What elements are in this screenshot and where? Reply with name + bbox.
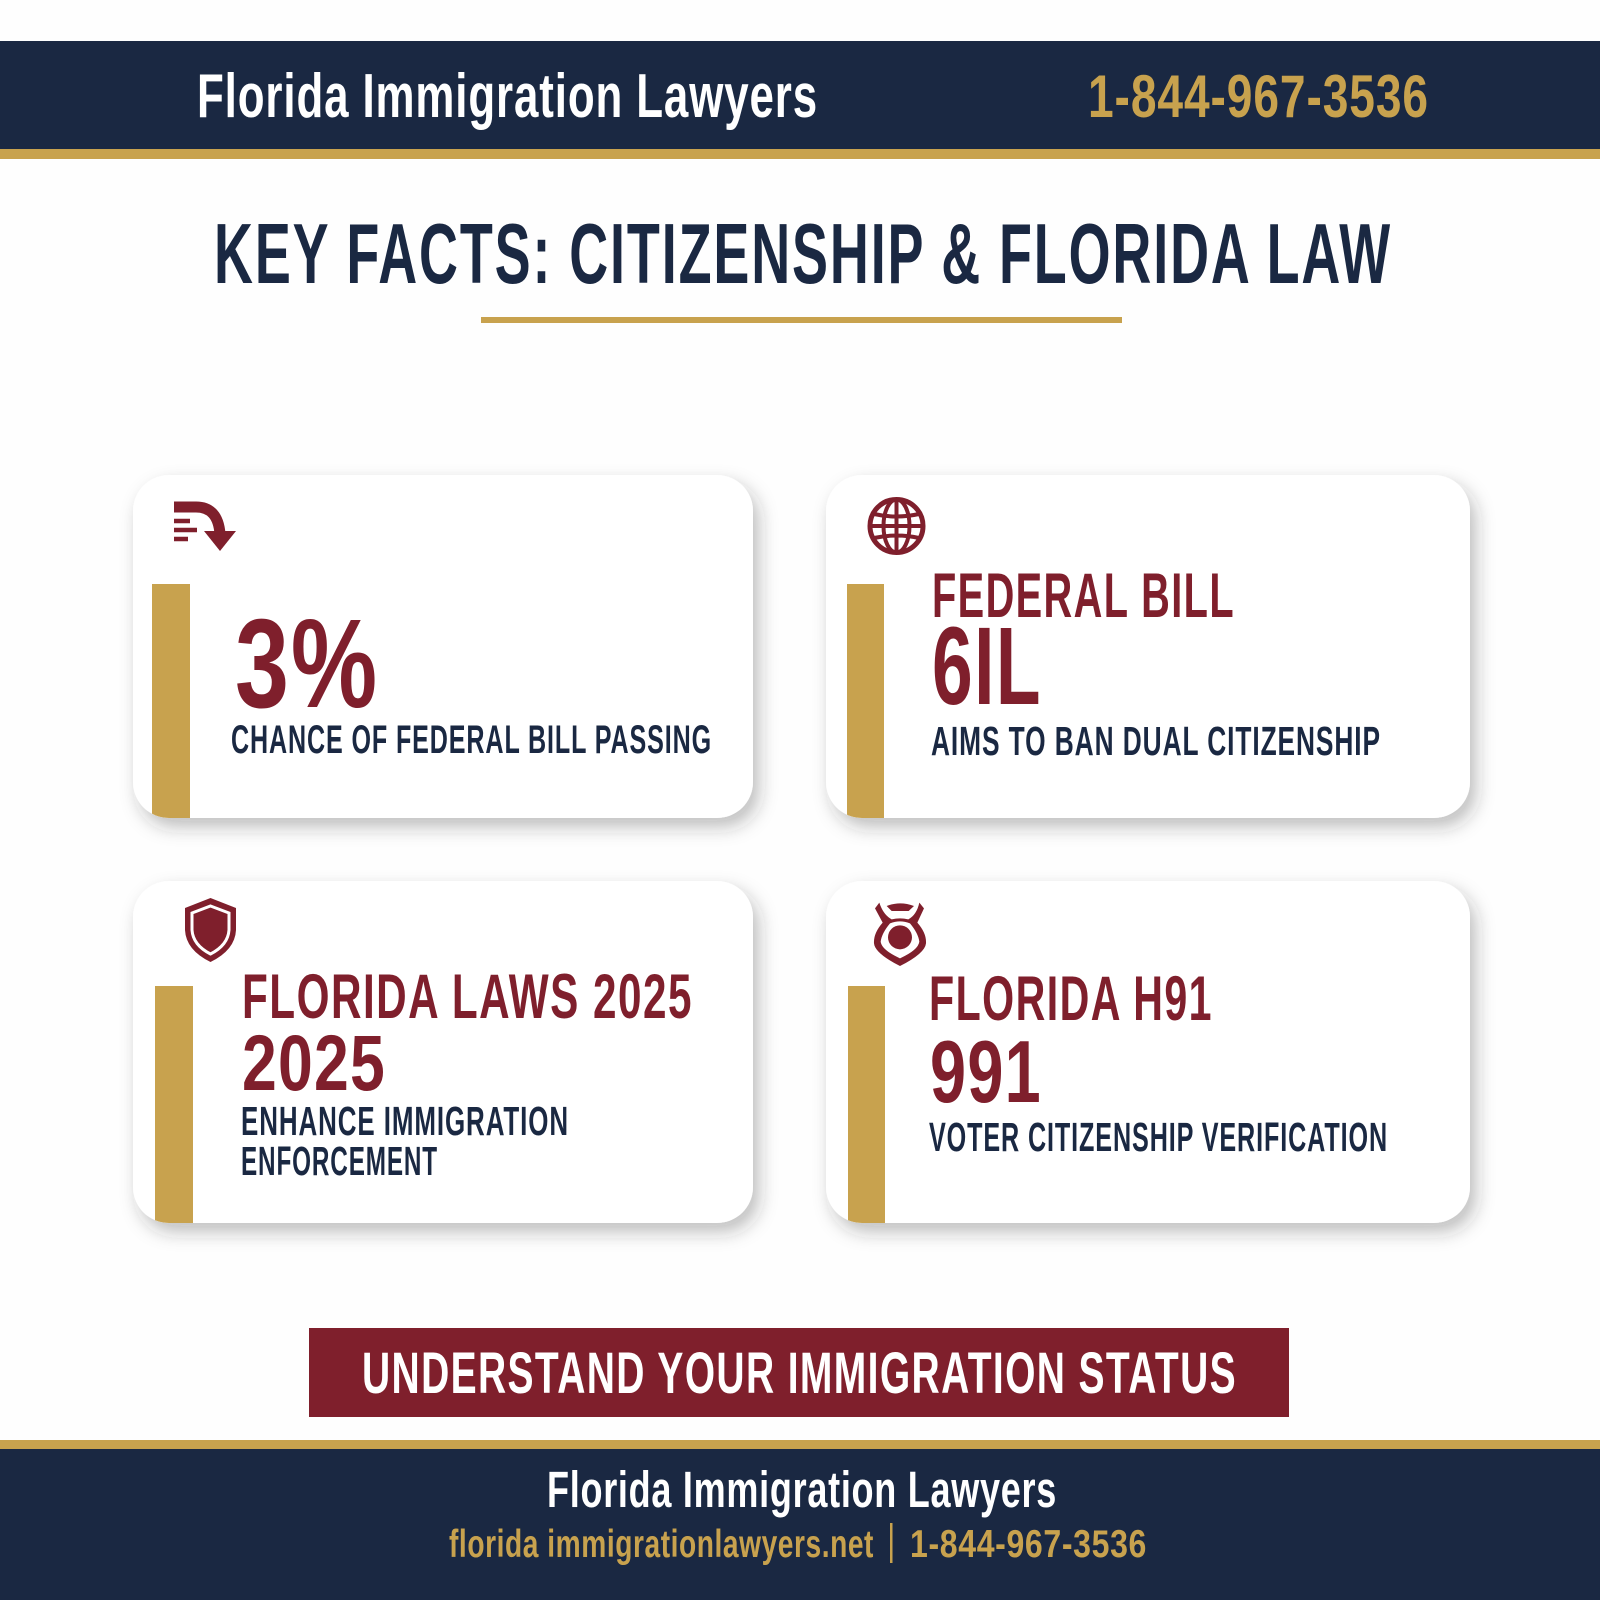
big number: 2025 xyxy=(242,1018,386,1107)
icon: badge xyxy=(874,903,926,966)
header phone number: 1-844-967-3536 xyxy=(1088,63,1429,130)
label: ENFORCEMENT xyxy=(241,1138,438,1184)
panel: federal bill xyxy=(826,475,1470,824)
header bar xyxy=(0,41,1600,159)
big number: 991 xyxy=(930,1022,1042,1121)
header firm name: Florida Immigration Lawyers xyxy=(197,62,818,131)
footer xyxy=(0,1440,1600,1600)
label xyxy=(241,1098,569,1184)
label: ENHANCE IMMIGRATION xyxy=(241,1098,569,1144)
footer website: florida immigrationlawyers.net xyxy=(449,1523,874,1566)
call to action banner xyxy=(309,1328,1289,1417)
footer firm name: Florida Immigration Lawyers xyxy=(547,1461,1057,1518)
footer phone number: 1-844-967-3536 xyxy=(910,1523,1147,1566)
panel: 3% chance xyxy=(133,475,753,824)
big number: 3% xyxy=(235,593,379,734)
icon: shield xyxy=(185,898,236,962)
panel: Florida laws 2025 xyxy=(133,881,753,1226)
heading: FLORIDA H91 xyxy=(929,964,1213,1034)
icon: globe xyxy=(870,500,923,552)
big number: 6IL xyxy=(932,605,1042,728)
panel: Florida H91 xyxy=(826,881,1470,1226)
heading: FEDERAL BILL xyxy=(932,561,1235,631)
heading: FLORIDA LAWS 2025 xyxy=(242,962,693,1032)
icon: downward arrow xyxy=(174,507,236,551)
label: CHANCE OF FEDERAL BILL PASSING xyxy=(231,718,712,762)
